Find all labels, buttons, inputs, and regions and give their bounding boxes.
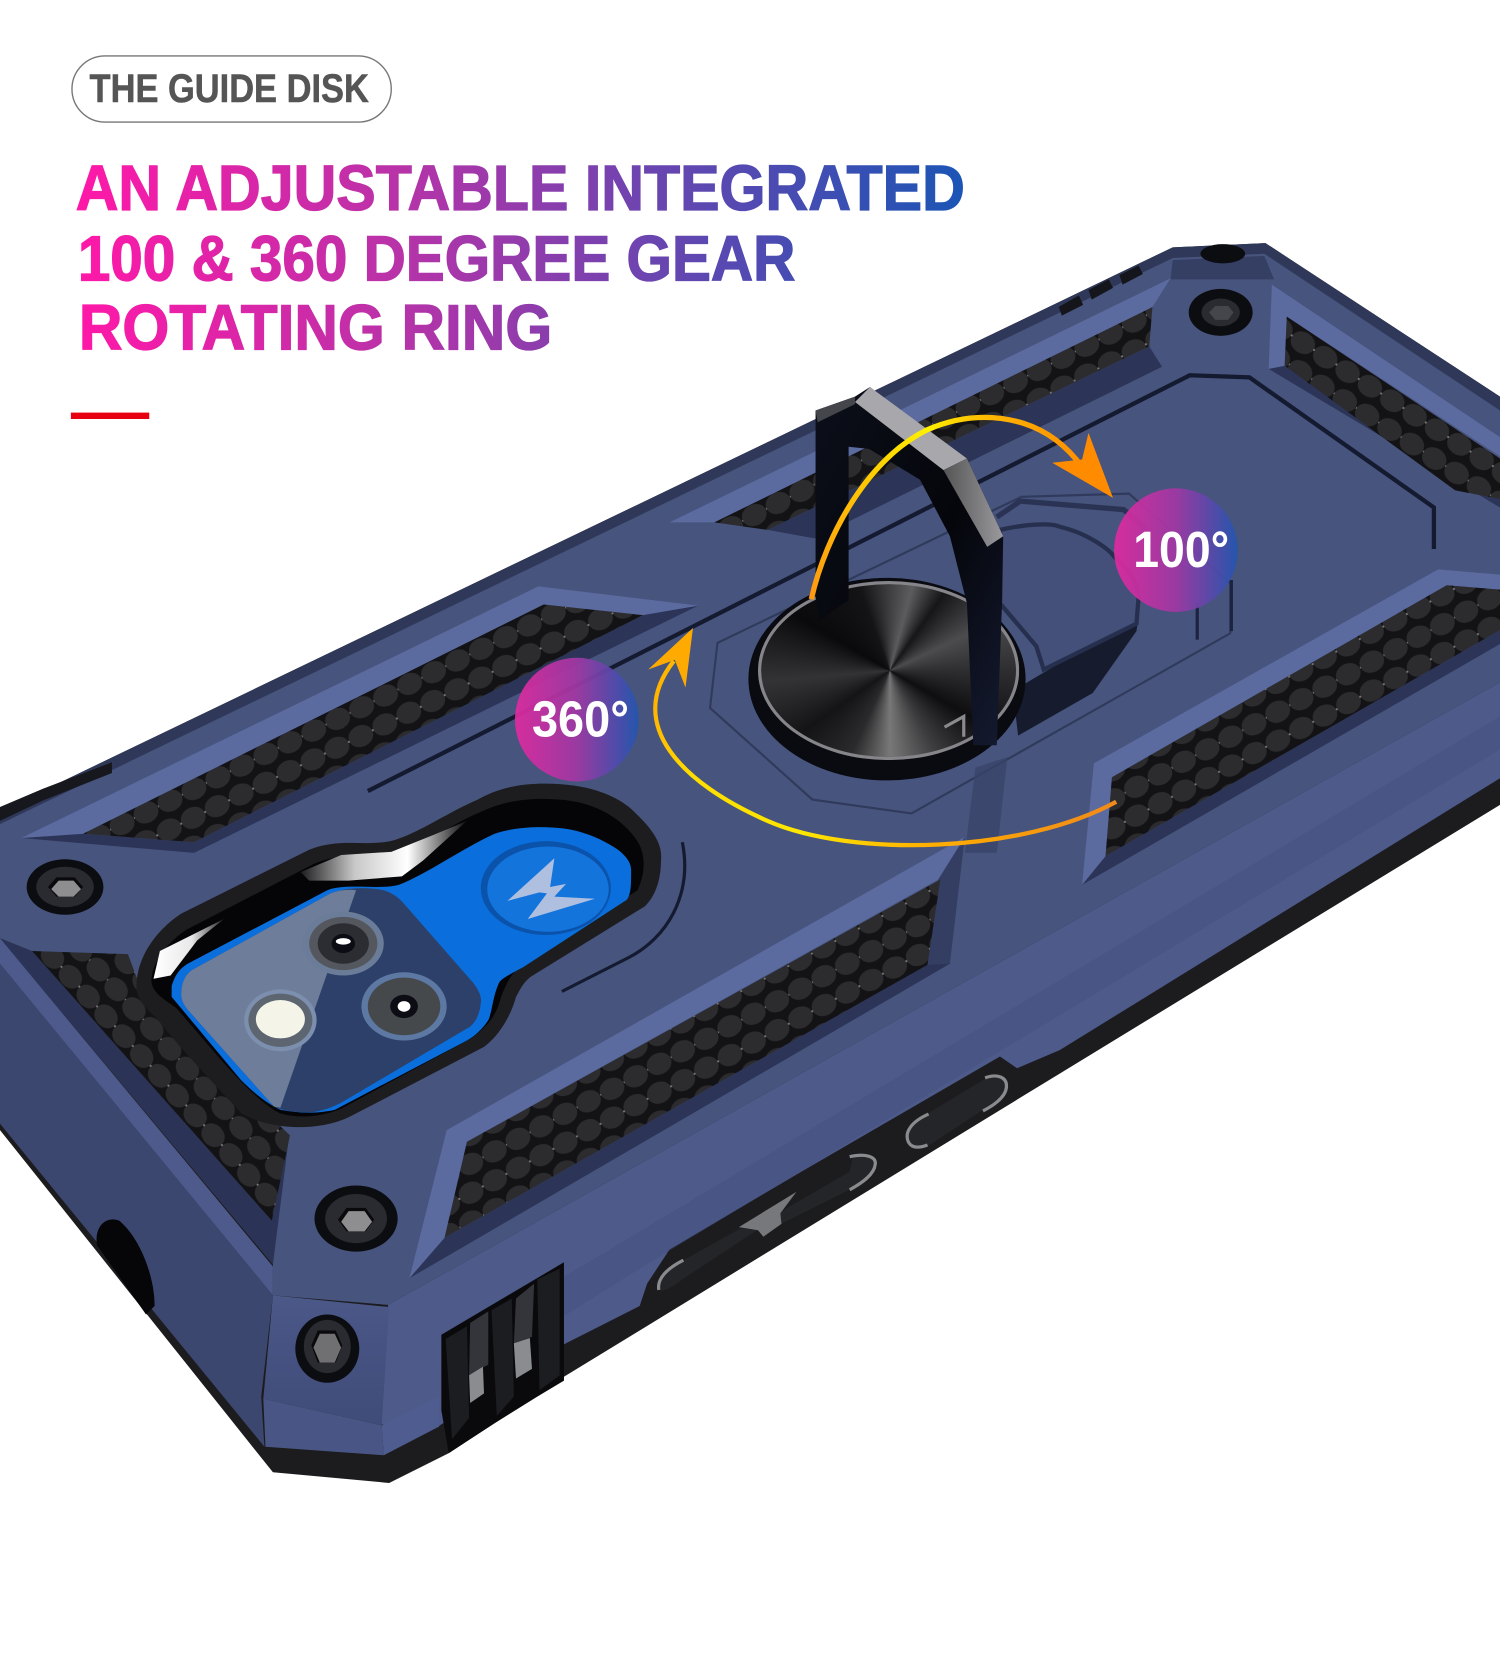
pill label: the guide disk: THE GUIDE DISK: [90, 67, 369, 111]
logo button: [481, 841, 611, 935]
rotation arrow 360 degrees: [648, 628, 1116, 845]
rotation arrow 100 degrees: [811, 417, 1113, 599]
gloss inner rim: [151, 799, 644, 1117]
charging port: [97, 1219, 155, 1315]
ring silver edge: [855, 387, 967, 470]
top face: [0, 254, 1500, 1305]
title: 100 & 360 DEGREE GEAR: [78, 222, 795, 294]
ring base plate: [710, 494, 1231, 853]
ring arch: [816, 387, 1003, 745]
plate bevel: [997, 501, 1146, 529]
side buttons: [659, 1076, 1006, 1290]
title: [76, 152, 965, 364]
red accent bar: [71, 413, 149, 419]
metal disc: [758, 581, 1019, 760]
volume arcs: [659, 1155, 875, 1290]
highlight strips: [21, 278, 1500, 1278]
corner grip ribs: [441, 1262, 564, 1453]
glass reflection: [181, 890, 356, 1108]
honeycomb grip panels: [32, 307, 1500, 1238]
volume connector: [739, 1192, 796, 1237]
left wall bevel highlight: [0, 938, 273, 1295]
glass camera island: [181, 888, 481, 1112]
disc base: [748, 578, 1026, 780]
title: AN ADJUSTABLE INTEGRATED: [76, 152, 965, 224]
vertical shadow below ring: [965, 757, 1007, 853]
long side band: [381, 682, 1500, 1426]
left wall: [0, 964, 273, 1447]
camera cutout: [136, 784, 661, 1127]
volume button upper: [778, 1156, 875, 1224]
chrome reflections: [154, 919, 224, 979]
case silhouette: [0, 243, 1500, 1483]
lens top: [303, 912, 384, 975]
phone case: [0, 243, 1500, 1483]
lower corner face: [263, 1399, 384, 1455]
badge: 360 degrees: 360°: [532, 691, 629, 748]
badge: 360 degrees: [515, 658, 639, 781]
ring top-left cap: [816, 397, 855, 422]
folded ring shadow: [1013, 616, 1139, 736]
flash: [244, 989, 317, 1051]
top edge band: [0, 243, 1500, 826]
badge: 100 degrees: 100°: [1133, 521, 1229, 578]
grooves: [368, 375, 1434, 991]
side band shadow: [533, 716, 1500, 1322]
buttons on top-left edge: [0, 762, 112, 821]
volume button lower: [659, 1228, 757, 1290]
power button: [907, 1077, 1006, 1149]
badge: 100 degrees: [1114, 488, 1238, 612]
side buttons on top edge: [1059, 265, 1143, 316]
blue camera plate: [172, 827, 631, 1113]
corner dark wedge: [0, 938, 289, 1264]
plate side grooves: [1197, 580, 1231, 640]
lens right: [361, 972, 447, 1041]
dark recess strips: [21, 347, 1500, 1278]
top corner dark facets: [1171, 256, 1274, 279]
lower corner side: [382, 1397, 439, 1455]
disc notch: [945, 716, 964, 737]
pill label: the guide disk: [72, 56, 391, 122]
ring recess: [1000, 524, 1139, 670]
corner face: [263, 1295, 389, 1425]
title: ROTATING RING: [79, 292, 552, 364]
screws: [27, 244, 1253, 1383]
